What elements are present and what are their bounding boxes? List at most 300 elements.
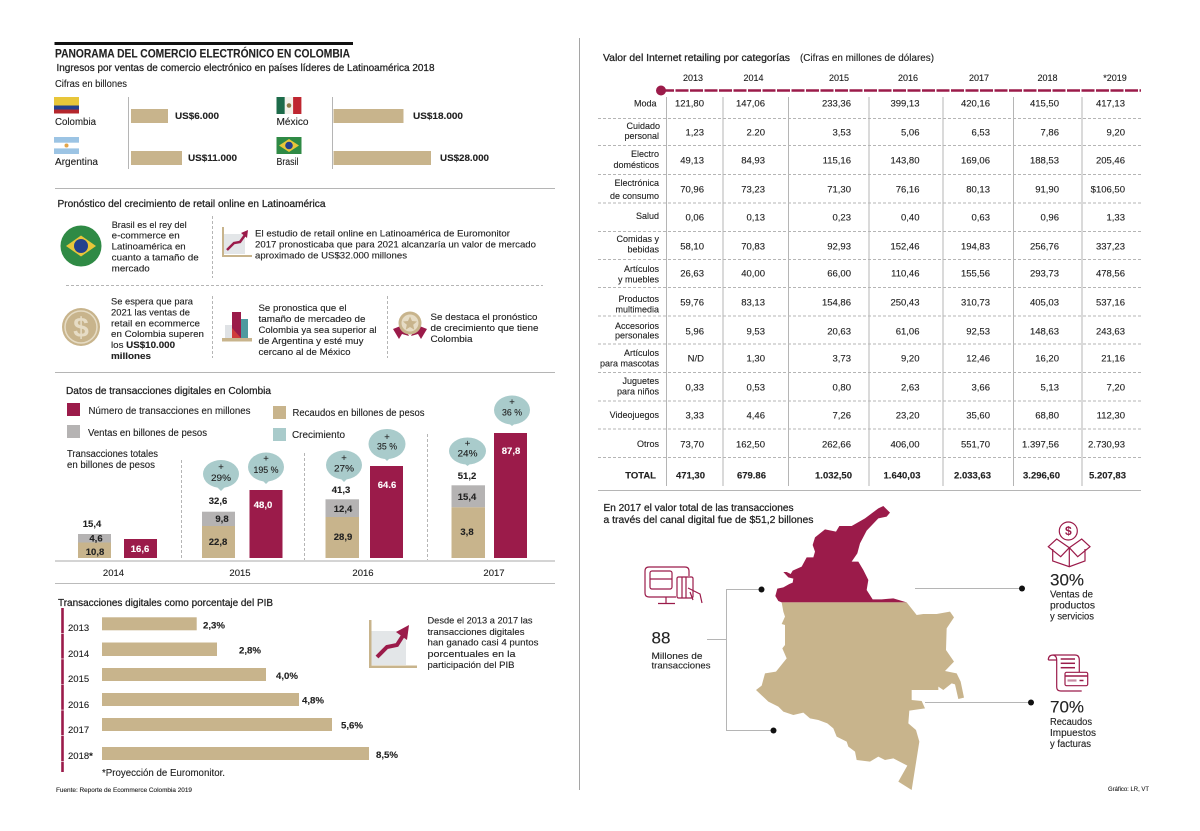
row: Total: 1.640,03 xyxy=(884,470,920,482)
bar: 2014: 2,8% xyxy=(239,646,262,656)
subtitle: Ingresos por ventas de comercio electrónico en países líderes de Latinoamérica 2018 xyxy=(56,63,435,74)
row: Juguetes para niños: Juguetes xyxy=(622,376,659,386)
row: Cuidado personal: 6,53 xyxy=(972,128,990,138)
year header: 2017 xyxy=(969,73,989,83)
row: Salud: 0,06 xyxy=(686,212,704,224)
bars: 2016 xyxy=(326,466,403,579)
flag: México xyxy=(276,97,301,114)
bars: 2014 xyxy=(78,519,157,579)
row: Electrodomésticos: 169,06 xyxy=(961,156,990,166)
row: Juguetes para niños: 5,13 xyxy=(1040,382,1059,394)
text: estudio: 2017 pronosticaba que para 2021 alcanzaría un valor de mercado xyxy=(255,240,536,250)
row: Electrónica de consumo xyxy=(610,178,1125,201)
row: Juguetes para niños: 2,63 xyxy=(901,382,920,394)
row: Accesorios personales: Accesorios xyxy=(615,321,660,331)
bars: 2017 xyxy=(452,433,527,579)
row: Electrónica de consumo: de consumo xyxy=(610,191,659,201)
bars: 2015: 9,8 xyxy=(215,514,229,525)
bubble: 2015 transacciones xyxy=(248,452,284,484)
row: Artículos para mascotas xyxy=(600,348,1125,368)
row: Accesorios personales: 9,53 xyxy=(746,326,765,338)
heading: tabla xyxy=(603,53,934,64)
row: Comidas y bebidas: bebidas xyxy=(627,244,659,254)
row: Productos multimedia: Productos xyxy=(618,294,659,304)
map: Colombia xyxy=(756,506,964,790)
row: Artículos y muebles: 293,73 xyxy=(1030,268,1059,280)
bars: 2015: 32,6 xyxy=(209,496,227,507)
bubble: 2016 ventas: 27% xyxy=(334,464,355,474)
row: Juguetes para niños: 0,80 xyxy=(832,382,851,394)
bar: 2013: 2013 xyxy=(68,623,89,634)
bars: 2015: 2015 xyxy=(229,568,251,579)
flag: Colombia xyxy=(54,97,79,114)
bars: 2015 xyxy=(202,490,282,579)
text: PIB xyxy=(428,616,539,671)
year header xyxy=(683,73,1127,83)
row: Videojuegos: 23,20 xyxy=(896,410,920,422)
source: Fuente: Reporte de Ecommerce Colombia 2019 xyxy=(56,787,192,794)
text: destaca: Se destaca el pronóstico xyxy=(430,312,538,323)
bars: 2015: 48,0 xyxy=(254,500,272,511)
text: tamaño de mercadeo: cercano al de México xyxy=(258,347,350,358)
row: Moda: 420,16 xyxy=(961,98,990,110)
text: destaca xyxy=(430,312,538,345)
row: Artículos para mascotas: 12,46 xyxy=(966,354,990,364)
stat: 70% xyxy=(1050,698,1096,750)
label: Argentina: Argentina xyxy=(55,157,98,168)
row: Moda: Moda xyxy=(634,98,656,108)
text: ventas 2021 xyxy=(111,296,204,362)
axis note: en billones de pesos xyxy=(67,460,155,471)
row: Total: 679.86 xyxy=(737,470,766,482)
panel: pronóstico xyxy=(58,199,543,362)
stat: 70%: Recaudos xyxy=(1050,717,1092,728)
bubble: 2017 transacciones xyxy=(494,396,530,426)
row: Accesorios personales: 92,53 xyxy=(966,326,990,338)
row: Cuidado personal: 9,20 xyxy=(1106,128,1125,138)
row: Comidas y bebidas: 256,76 xyxy=(1030,242,1059,252)
row: Productos multimedia: 154,86 xyxy=(822,298,851,308)
row: Accesorios personales: personales xyxy=(615,330,659,340)
note: cifras: Cifras en billones xyxy=(55,79,127,90)
heading: mapa: a través del canal digital fue de $51,2 billones xyxy=(604,515,814,526)
bars: 2016: 64.6 xyxy=(378,480,396,491)
axis line xyxy=(61,608,64,772)
title xyxy=(54,42,353,60)
bars: 2014: 10,8 xyxy=(86,547,104,558)
text: PIB: transacciones digitales xyxy=(428,627,525,638)
icon: factura y tarjeta xyxy=(1048,655,1088,691)
row: Artículos para mascotas: 1,30 xyxy=(746,354,765,364)
bubble: 2017 ventas xyxy=(449,438,486,466)
row: Total: 471,30 xyxy=(676,470,705,482)
heading: PIB: Transacciones digitales como porcentaje del PIB xyxy=(58,598,273,609)
row: Comidas y bebidas: 152,46 xyxy=(890,242,920,252)
icon: moneda de dólar xyxy=(62,308,100,346)
row: Productos multimedia: 250,43 xyxy=(890,298,920,308)
value: Argentina: US$11.000 xyxy=(188,153,237,164)
row: Accesorios personales: 148,63 xyxy=(1030,326,1059,338)
bar: 2016 xyxy=(68,693,325,711)
row: Productos multimedia xyxy=(615,294,1125,314)
bars: 2015: 22,8 xyxy=(209,537,227,548)
bars: 2014: 16,6 xyxy=(131,544,149,555)
text: destaca: Colombia xyxy=(430,334,473,345)
value: Colombia: US$6.000 xyxy=(175,111,219,122)
row: Juguetes para niños: 0,53 xyxy=(746,382,765,394)
icon: gráfica PIB xyxy=(369,620,417,668)
bubble: 2017 transacciones: + xyxy=(509,397,515,408)
row: Accesorios personales: 243,63 xyxy=(1096,326,1125,338)
bubble: 2015 ventas: 29% xyxy=(211,473,232,484)
text: tamaño de mercadeo: de Argentina y esté muy xyxy=(258,336,364,347)
row: Accesorios personales: 5,96 xyxy=(686,326,704,338)
year header: *2019 xyxy=(1103,73,1127,83)
row: Videojuegos: Videojuegos xyxy=(610,410,659,420)
bar: 2017 xyxy=(68,718,364,736)
icon: gráfica ascendente xyxy=(222,227,252,257)
bar: 2017: 5,6% xyxy=(341,720,364,732)
row: Cuidado personal: 2.20 xyxy=(746,128,765,138)
bubble: 2016 transacciones xyxy=(368,429,406,461)
legend: Ventas en billones de pesos xyxy=(88,428,207,439)
text: Brasil: e-commerce en xyxy=(112,230,180,242)
stat: 88 millones: Millones de xyxy=(652,651,702,662)
row: Artículos y muebles: Artículos xyxy=(624,264,659,274)
row: Moda: 399,13 xyxy=(890,98,920,110)
row: Moda: 147,06 xyxy=(736,98,765,110)
row: Videojuegos: 4,46 xyxy=(746,410,765,422)
stat: 88 millones: 88 xyxy=(652,628,670,648)
bars: 2017: 3,8 xyxy=(460,527,474,538)
icon: medalla xyxy=(393,312,427,339)
bar: 2016: 4,8% xyxy=(302,696,325,706)
row: Productos multimedia: 405,03 xyxy=(1030,298,1059,308)
text: ventas 2021: millones xyxy=(111,351,151,362)
row: Artículos para mascotas: 9,20 xyxy=(901,354,920,364)
row: Electrodomésticos: Electro xyxy=(631,149,659,159)
row: Total: TOTAL xyxy=(625,470,656,482)
row: Electrodomésticos: domésticos xyxy=(613,160,659,170)
row: Salud: 0,40 xyxy=(901,212,920,224)
stat: 88 millones xyxy=(652,628,711,672)
bars: 2016: 41,3 xyxy=(332,485,350,496)
row: Otros xyxy=(637,439,1125,450)
row: Productos multimedia: 537,16 xyxy=(1096,298,1125,308)
row: Accesorios personales: 61,06 xyxy=(896,326,920,338)
stat: 88 millones: transacciones xyxy=(652,660,711,672)
bar: 2018: 2018* xyxy=(68,751,93,762)
value: México: US$18.000 xyxy=(413,111,463,122)
row: Videojuegos xyxy=(610,410,1125,422)
row: Accesorios personales: 20,63 xyxy=(827,326,851,338)
bubble: 2016 ventas: + xyxy=(341,453,347,464)
flag: Brasil xyxy=(276,137,302,154)
text: tamaño de mercadeo: Se pronostica que el xyxy=(258,303,346,314)
row: Cuidado personal: 1,23 xyxy=(686,128,704,138)
row: Juguetes para niños: 0,33 xyxy=(686,382,704,394)
row: Cuidado personal: 7,86 xyxy=(1040,128,1059,138)
row: Videojuegos: 35,60 xyxy=(966,410,990,422)
year header: 2013 xyxy=(683,73,703,83)
bars: 2014: 4,6 xyxy=(89,534,103,544)
row: Artículos y muebles: 110,46 xyxy=(891,268,920,280)
row: Comidas y bebidas xyxy=(616,234,1125,254)
bubble: 2015 ventas xyxy=(203,460,239,491)
row: Cuidado personal: personal xyxy=(624,131,659,141)
row: Moda: 121,80 xyxy=(675,98,704,110)
row: Electrodomésticos: 143,80 xyxy=(890,156,920,166)
year header: 2016 xyxy=(898,73,918,83)
stat: 30%: 30% xyxy=(1050,570,1084,590)
row: Electrónica de consumo: 91,90 xyxy=(1035,184,1059,196)
bubble: 2016 transacciones: 35 % xyxy=(377,442,398,452)
text: estudio xyxy=(255,228,536,262)
panel: transacciones digitales xyxy=(55,386,555,584)
row: Electrodomésticos: 188,53 xyxy=(1030,156,1059,166)
panel: tabla de categorías xyxy=(598,53,1141,490)
bubble: 2016 ventas xyxy=(326,450,362,482)
row: Comidas y bebidas: 92,93 xyxy=(827,242,851,252)
row: Juguetes para niños: 3,66 xyxy=(972,382,990,394)
row: Electrónica de consumo: 76,16 xyxy=(896,184,920,196)
text: tamaño de mercadeo: Colombia ya sea superior al xyxy=(258,325,376,336)
panel: mapa xyxy=(604,503,1096,790)
panel: ingresos por país xyxy=(54,63,489,169)
bar: 2017: 2017 xyxy=(68,725,89,736)
text: ventas 2021: los US$10.000 xyxy=(111,340,175,351)
row: Otros: 551,70 xyxy=(961,440,990,450)
row: Artículos para mascotas: 21,16 xyxy=(1101,354,1125,364)
flag: Argentina xyxy=(54,137,79,154)
row: Artículos y muebles: 26,63 xyxy=(680,268,704,280)
bar: 2015: 2015 xyxy=(68,674,89,685)
year header: 2018 xyxy=(1037,73,1058,83)
icon: caja con dólar: $ xyxy=(1065,524,1072,538)
bubble: 2015 transacciones: + xyxy=(263,454,269,464)
row: Juguetes para niños: para niños xyxy=(617,386,659,396)
bar: Brasil xyxy=(334,151,431,165)
row: Productos multimedia: multimedia xyxy=(615,304,659,314)
row: Electrodomésticos: 115,16 xyxy=(823,156,851,166)
row: Salud: 0,96 xyxy=(1040,212,1059,224)
row: Videojuegos: 7,26 xyxy=(832,410,851,422)
label: Colombia: Colombia xyxy=(55,117,96,128)
row: Electrónica de consumo: Electrónica xyxy=(614,178,659,188)
row: Productos multimedia: 310,73 xyxy=(961,298,990,308)
row: Artículos para mascotas: 3,73 xyxy=(832,354,851,364)
label: México: México xyxy=(276,117,309,128)
stat: 70%: 70% xyxy=(1050,698,1084,716)
legend xyxy=(67,403,424,441)
heading: tabla: (Cifras en millones de dólares) xyxy=(800,53,934,64)
text: PIB: participación del PIB xyxy=(428,660,514,671)
row: Juguetes para niños xyxy=(617,376,1125,396)
bubble: 2017 ventas: + xyxy=(465,438,471,450)
row: Cuidado personal: 5,06 xyxy=(901,128,920,138)
bars: 2017: 51,2 xyxy=(458,471,476,482)
text: Brasil xyxy=(112,220,199,274)
row: Total: 5.207,83 xyxy=(1089,470,1126,482)
stat: 30%: productos xyxy=(1050,600,1095,612)
text: Brasil: cuanto a tamaño de xyxy=(112,252,199,264)
credit: Gráfico: LR, VT xyxy=(1108,786,1149,793)
bars: 2016: 2016 xyxy=(352,568,374,579)
text: ventas 2021: Se espera que para xyxy=(111,296,194,308)
row: Salud xyxy=(636,211,1125,224)
text: estudio: El estudio de retail online en Latinoamérica de Euromonitor xyxy=(255,228,510,240)
legend: Crecimiento xyxy=(292,430,345,441)
row: Salud: 0,13 xyxy=(746,212,765,224)
row: Electrodomésticos xyxy=(613,149,1125,170)
stat: 70%: Impuestos xyxy=(1050,728,1096,739)
row: Artículos y muebles: 155,56 xyxy=(961,268,990,280)
stat: 30%: Ventas de xyxy=(1050,590,1093,600)
text: destaca: de crecimiento que tiene xyxy=(430,323,538,334)
row: Moda: 233,36 xyxy=(822,98,851,110)
heading: pronóstico: Pronóstico del crecimiento de retail online en Latinoamérica xyxy=(58,199,326,210)
text: tamaño de mercadeo xyxy=(258,303,376,358)
bar: 2015: 4,0% xyxy=(276,671,299,682)
footnote: *Proyección de Euromonitor. xyxy=(102,768,225,779)
text: ventas 2021: 2021 las ventas de xyxy=(111,308,190,318)
bars: 2016: 28,9 xyxy=(334,532,352,543)
text: PIB: Desde el 2013 a 2017 las xyxy=(428,616,533,626)
row: Salud: 1,33 xyxy=(1106,212,1125,224)
row: Electrónica de consumo: 71,30 xyxy=(827,184,851,196)
bar: 2014 xyxy=(68,642,262,660)
value: Brasil: US$28.000 xyxy=(440,153,489,164)
axis note: Transacciones totales xyxy=(67,449,158,460)
row: Moda: 415,50 xyxy=(1030,98,1059,110)
bar: Colombia xyxy=(131,109,168,123)
panel: porcentaje del PIB xyxy=(58,598,539,779)
icon: moneda de dólar: $ xyxy=(73,312,89,343)
row: Comidas y bebidas: 70,83 xyxy=(741,242,765,252)
title: PANORAMA DEL COMERCIO ELECTRÓNICO EN COLOMBIA xyxy=(55,46,350,60)
text: PIB: han ganado casi 4 puntos xyxy=(428,638,539,648)
timeline xyxy=(656,86,1141,96)
leader line: recaudos xyxy=(925,700,1034,706)
row: Electrónica de consumo: $106,50 xyxy=(1091,184,1125,196)
year header: 2014 xyxy=(743,73,764,83)
row: Artículos para mascotas: 16,20 xyxy=(1035,354,1059,364)
year header: 2015 xyxy=(829,73,849,83)
text: ventas 2021: en Colombia superen xyxy=(111,329,204,340)
row: Videojuegos: 68,80 xyxy=(1035,410,1059,422)
bar: 2013: 2,3% xyxy=(203,620,226,632)
row: Moda: 417,13 xyxy=(1096,98,1125,110)
text: tamaño de mercadeo: tamaño de mercadeo de xyxy=(258,314,366,325)
row: Artículos y muebles: 66,00 xyxy=(827,268,851,280)
bars: 2016: 12,4 xyxy=(334,504,353,515)
row: Electrodomésticos: 49,13 xyxy=(680,156,704,166)
bubble: 2016 transacciones: + xyxy=(384,432,390,443)
row: Comidas y bebidas: 58,10 xyxy=(680,242,704,252)
row: Otros: Otros xyxy=(637,439,659,449)
row: Videojuegos: 112,30 xyxy=(1097,410,1125,422)
row: Salud: 0,63 xyxy=(972,212,990,224)
leader line: ventas xyxy=(915,586,1025,592)
icon: caja con dólar xyxy=(1048,522,1090,567)
stat: 30% xyxy=(1050,570,1095,622)
row: Total: 1.032,50 xyxy=(815,470,852,482)
bar: 2018: 8,5% xyxy=(376,750,399,761)
row: Electrodomésticos: 205,46 xyxy=(1096,156,1125,166)
row: Otros: 162,50 xyxy=(736,440,765,450)
row: Cuidado personal: Cuidado xyxy=(626,121,660,131)
row: Artículos y muebles: 478,56 xyxy=(1096,268,1125,280)
bar: 2016: 2016 xyxy=(68,700,89,711)
bubble: 2015 ventas: + xyxy=(218,462,224,473)
row: Comidas y bebidas: Comidas y xyxy=(616,234,659,244)
row: Electrónica de consumo: 70,96 xyxy=(680,184,704,196)
row: Comidas y bebidas: 194,83 xyxy=(961,242,990,252)
row: Electrónica de consumo: 80,13 xyxy=(966,184,990,196)
bars: 2017: 87,8 xyxy=(502,446,520,457)
legend: Número de transacciones en millones xyxy=(88,406,250,417)
label: Brasil: Brasil xyxy=(276,157,298,168)
row: Juguetes para niños: 7,20 xyxy=(1106,382,1125,394)
bars: 2014: 15,4 xyxy=(83,519,102,530)
text: PIB: porcentuales en la xyxy=(428,649,516,660)
bars: 2014: 2014 xyxy=(103,568,124,579)
bar: Argentina xyxy=(131,151,182,165)
row: Electrodomésticos: 84,93 xyxy=(741,156,765,166)
legend: Recaudos en billones de pesos xyxy=(292,408,424,419)
row: Artículos y muebles: y muebles xyxy=(618,274,659,284)
icon: computador y tarjeta xyxy=(645,567,702,604)
bar: México xyxy=(334,109,404,123)
row: Artículos y muebles xyxy=(618,264,1125,284)
row: Videojuegos: 3,33 xyxy=(686,410,704,422)
bar: 2014: 2014 xyxy=(68,649,89,660)
row: Cuidado personal xyxy=(624,121,1125,141)
row: Otros: 2.730,93 xyxy=(1088,440,1125,450)
bar: 2013 xyxy=(68,617,226,634)
text: Brasil: Latinoamérica en xyxy=(112,242,186,252)
bubble: 2017 ventas: 24% xyxy=(458,448,478,460)
text: Brasil: mercado xyxy=(112,264,150,274)
heading: mapa xyxy=(604,503,814,526)
icon: Brasil xyxy=(60,226,102,266)
heading: tabla: Valor del Internet retailing por categorías xyxy=(603,53,790,64)
icon: barras xyxy=(222,312,252,342)
row: Moda xyxy=(634,98,1125,110)
row: Productos multimedia: 59,76 xyxy=(680,298,704,308)
heading: datos de transacciones: Datos de transacciones digitales en Colombia xyxy=(66,386,271,397)
text: ventas 2021: retail en ecommerce xyxy=(111,318,200,330)
bubble: 2015 transacciones: 195 % xyxy=(254,465,279,476)
row: Total: 3.296,60 xyxy=(1023,470,1060,482)
row: Artículos y muebles: 40,00 xyxy=(741,268,765,280)
row: Accesorios personales xyxy=(615,321,1125,340)
row: Otros: 1.397,56 xyxy=(1022,440,1059,450)
bar: 2015 xyxy=(68,668,299,685)
row: Artículos para mascotas: Artículos xyxy=(624,348,659,358)
row: Electrónica de consumo: 73,23 xyxy=(741,184,765,196)
row: Artículos para mascotas: N/D xyxy=(688,354,704,364)
stat: 30%: y servicios xyxy=(1050,612,1094,622)
axis note xyxy=(67,449,158,471)
bars: 2017: 2017 xyxy=(483,568,505,579)
leader lines: transacciones xyxy=(707,586,776,734)
row: Artículos para mascotas: para mascotas xyxy=(600,358,659,368)
bubble: 2017 transacciones: 36 % xyxy=(502,408,523,418)
row: Total xyxy=(625,470,1126,482)
row: Otros: 406,00 xyxy=(890,440,920,450)
row: Salud: 0,23 xyxy=(832,212,851,224)
